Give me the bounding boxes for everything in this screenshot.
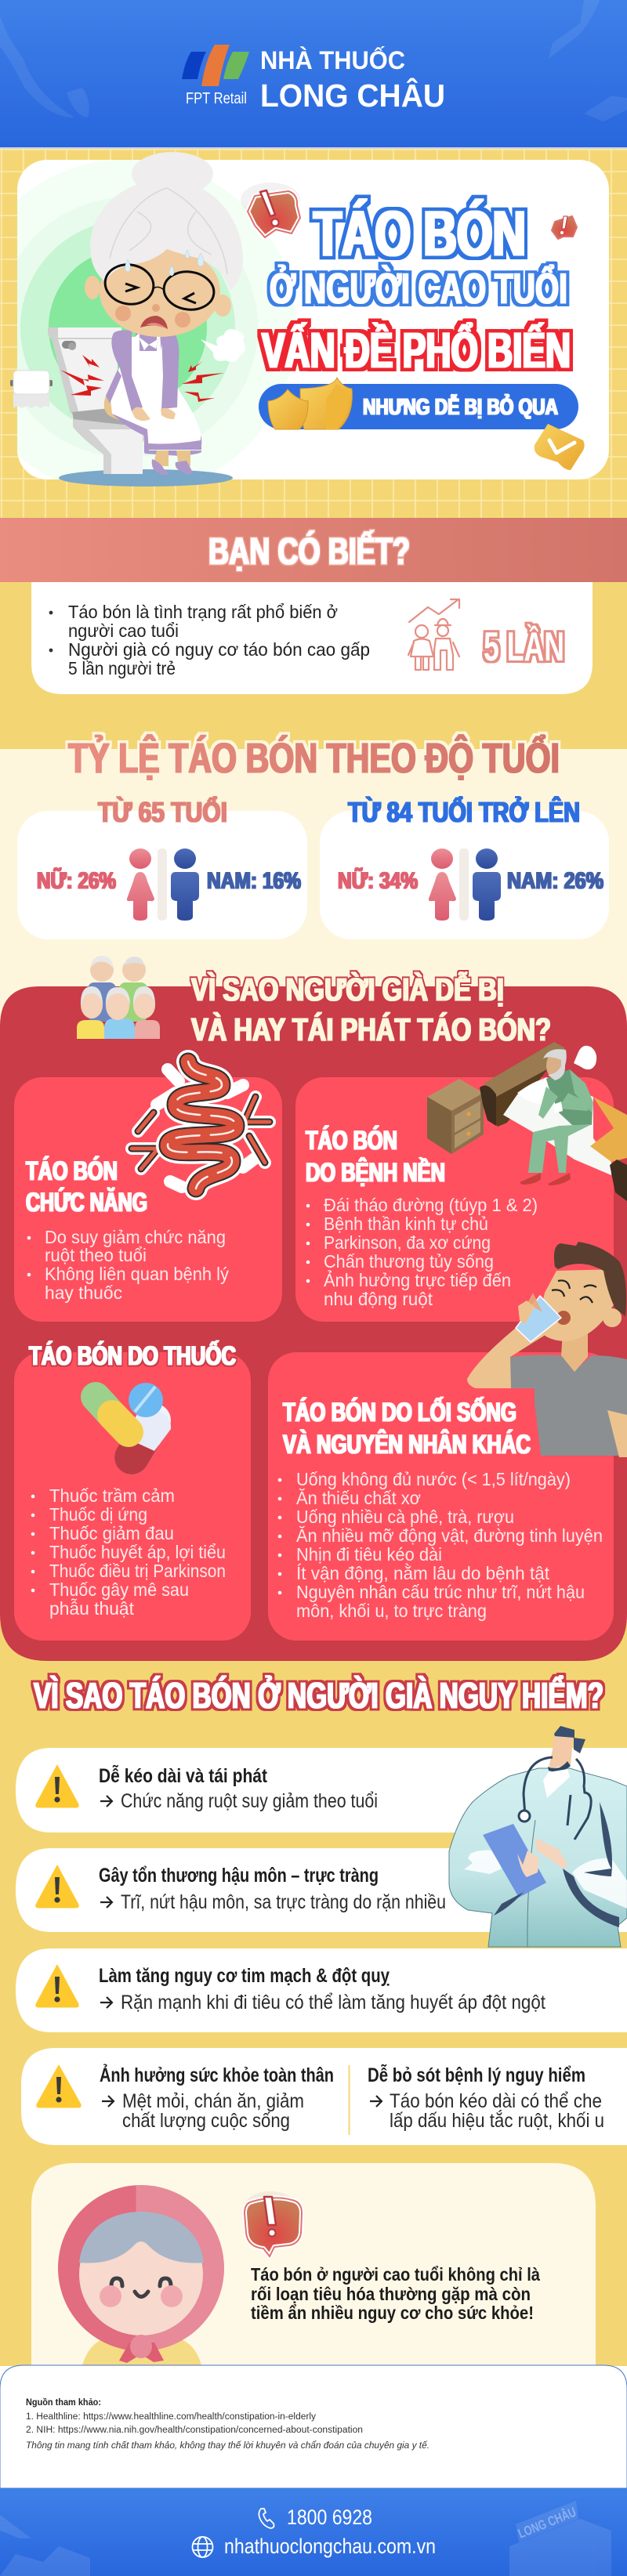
bullet list: Chấn thương tủy sống bbox=[324, 1251, 494, 1272]
bullet list: hay thuốc bbox=[45, 1283, 122, 1303]
head bbox=[541, 1269, 620, 1341]
illustration: grandmother on toilet bbox=[10, 152, 245, 487]
bullet list: Ăn thiếu chất xơ bbox=[296, 1488, 421, 1508]
card bbox=[0, 2365, 627, 2488]
heading line 1: VÌ SAO NGƯỜI GIÀ DỄ BỊ bbox=[191, 971, 504, 1008]
card heading: TÁO BÓN DO THUỐC bbox=[29, 1340, 236, 1371]
banner heading: BẠN CÓ BIẾT? bbox=[208, 530, 410, 573]
fact list: người cao tuổi bbox=[68, 620, 179, 641]
head bbox=[85, 152, 243, 337]
icon: warning bbox=[36, 1965, 78, 2007]
left description bbox=[122, 2090, 304, 2132]
panel: vì sao người già dễ bị bbox=[0, 986, 627, 1661]
fact list: Người già có nguy cơ táo bón cao gấp bbox=[68, 639, 370, 660]
right heading: Dễ bỏ sót bệnh lý nguy hiểm bbox=[368, 2063, 585, 2086]
banner bbox=[0, 518, 627, 582]
man in green bbox=[520, 1049, 593, 1185]
illustration: man drinking water bbox=[467, 1242, 627, 1457]
panel: từ 65 tuổi bbox=[17, 794, 307, 939]
bullet list: Uống không đủ nước (< 1,5 lít/ngày) bbox=[296, 1469, 571, 1489]
speech bubble bbox=[574, 1046, 596, 1069]
left description: chất lượng cuộc sống bbox=[122, 2110, 290, 2132]
icon: alert badge bbox=[245, 2191, 302, 2256]
bullet list: Do suy giảm chức năng bbox=[45, 1227, 226, 1247]
title line 1: TÁO BÓN bbox=[314, 198, 526, 270]
icon: intestine bbox=[132, 1062, 270, 1189]
panel: bạn có biết bbox=[0, 518, 627, 694]
icon: pills bbox=[96, 1383, 171, 1457]
bullet list: Thuốc trầm cảm bbox=[49, 1485, 175, 1506]
bullet list: nhu động ruột bbox=[324, 1289, 433, 1309]
hero background grid bbox=[0, 149, 627, 518]
headboard bbox=[480, 1042, 566, 1127]
bullet list: Ăn nhiều mỡ động vật, đường tinh luyện bbox=[296, 1525, 603, 1546]
left arrow bbox=[102, 2096, 114, 2107]
panel: risk 4 bbox=[21, 2048, 627, 2145]
nightstand bbox=[427, 1079, 484, 1154]
illustration: elderly man on bed bbox=[427, 1042, 627, 1201]
panel: táo bón chức năng bbox=[14, 1062, 282, 1322]
hair bbox=[554, 1242, 626, 1316]
card bbox=[17, 811, 307, 939]
arrow bbox=[100, 1796, 112, 1807]
bullet list: Đái tháo đường (túyp 1 & 2) bbox=[324, 1195, 538, 1215]
panel: risk 1 bbox=[16, 1748, 627, 1833]
right description: Táo bón kéo dài có thể che bbox=[390, 2090, 602, 2112]
card bbox=[31, 2163, 596, 2382]
bullet list: ruột theo tuổi bbox=[45, 1245, 147, 1265]
icon: warning bbox=[36, 1765, 78, 1807]
hero card bbox=[0, 159, 609, 496]
bullet list: Thuốc gây mê sau bbox=[49, 1579, 189, 1600]
bullet list: Nguyên nhân cấu trúc như trĩ, nứt hậu bbox=[296, 1582, 585, 1602]
card bbox=[320, 811, 609, 939]
icon: gold check badge bbox=[535, 424, 585, 470]
heading: Gây tổn thương hậu môn – trực tràng bbox=[99, 1865, 379, 1887]
phone number: 1800 6928 bbox=[287, 2505, 372, 2529]
bullet list: Ảnh hưởng trực tiếp đến bbox=[324, 1268, 511, 1290]
card heading: TÁO BÓN bbox=[26, 1156, 118, 1186]
panel: táo bón do thuốc bbox=[14, 1340, 251, 1641]
notch bbox=[268, 1388, 535, 1459]
card heading: TÁO BÓN DO LỐI SỐNG bbox=[283, 1397, 516, 1427]
decorative store building bbox=[0, 2501, 611, 2576]
card notch and lifestyle text bbox=[268, 1388, 603, 1621]
bullet list: Thuốc huyết áp, lợi tiểu bbox=[49, 1542, 226, 1562]
label: NHƯNG DỄ BỊ BỎ QUA bbox=[363, 393, 558, 420]
bullet list: phẫu thuật bbox=[49, 1598, 135, 1619]
card bbox=[14, 1352, 251, 1641]
label: FPT Retail: FPT Retail bbox=[186, 90, 247, 107]
icon: elderly couple with rising chart bbox=[408, 599, 459, 670]
arrow bbox=[100, 1997, 112, 2008]
heading: vì sao người già dễ bị và hay tái phát táo bón bbox=[191, 971, 551, 1047]
glasses bbox=[102, 261, 216, 313]
left description: Mệt mỏi, chán ăn, giảm bbox=[122, 2090, 304, 2112]
shirt bbox=[510, 1355, 627, 1456]
rug bbox=[59, 469, 233, 487]
card heading: DO BỆNH NỀN bbox=[306, 1158, 445, 1188]
card bbox=[295, 1077, 614, 1322]
fact list bbox=[49, 602, 370, 678]
message: tiềm ẩn nhiều nguy cơ cho sức khỏe! bbox=[251, 2303, 534, 2323]
bullet list: Parkinson, đa xơ cứng bbox=[324, 1232, 491, 1253]
message bbox=[251, 2264, 540, 2323]
heading: Dễ kéo dài và tái phát bbox=[99, 1764, 268, 1787]
card bbox=[14, 1077, 282, 1322]
description: Trĩ, nứt hậu môn, sa trực tràng do rặn nhiều bbox=[121, 1891, 446, 1913]
row bbox=[21, 2048, 627, 2145]
pill: nhưng dễ bị bỏ qua bbox=[259, 384, 578, 429]
icon: globe bbox=[193, 2537, 213, 2557]
arm bbox=[467, 1316, 556, 1391]
icon: female and male figures bbox=[127, 848, 199, 921]
right description: lấp dấu hiệu tắc ruột, khối u bbox=[390, 2109, 604, 2132]
bullet list bbox=[27, 1227, 229, 1303]
icon: group of elderly people bbox=[77, 956, 160, 1039]
bullet list bbox=[31, 1485, 226, 1619]
stethoscope bbox=[524, 1757, 591, 1840]
cheeks, nose and mouth bbox=[115, 304, 190, 329]
coat bbox=[449, 1768, 627, 1947]
panel: risk 3 bbox=[16, 1948, 627, 2032]
right description bbox=[390, 2090, 604, 2132]
right arrow bbox=[370, 2096, 382, 2107]
section background: yellow bbox=[0, 582, 627, 749]
footer band bbox=[0, 2488, 627, 2576]
fact card bbox=[31, 582, 593, 694]
row bbox=[16, 1848, 627, 1932]
heading: Làm tăng nguy cơ tim mạch & đột quỵ bbox=[99, 1965, 390, 1987]
label: Nhà thuốc: NHÀ THUỐC bbox=[260, 46, 405, 74]
hair bun bbox=[132, 152, 213, 196]
icon: red alert badge small bbox=[552, 216, 577, 239]
description: Rặn mạnh khi đi tiêu có thể làm tăng huyết áp đột ngột bbox=[121, 1992, 545, 2013]
arrow bbox=[100, 1897, 112, 1908]
panel: closing message bbox=[31, 2163, 596, 2382]
left heading: Ảnh hưởng sức khỏe toàn thân bbox=[100, 2063, 334, 2086]
icon: warning bbox=[36, 1865, 78, 1908]
illustration: doctor bbox=[449, 1726, 627, 1947]
section background: cream bbox=[0, 749, 627, 1062]
logo: FPT Retail and Nhà thuốc Long Châu bbox=[182, 45, 445, 114]
disclaimer: Thông tin mang tính chất tham khảo, không thay thế lời khuyên và chẩn đoán của chuyên gia y tế. bbox=[26, 2441, 429, 2451]
panel: references bbox=[0, 2365, 627, 2488]
head bbox=[548, 1726, 585, 1772]
heading: TỪ 65 TUỔI bbox=[98, 794, 227, 828]
hair bbox=[90, 179, 243, 291]
bullet list: Thuốc dị ứng bbox=[49, 1504, 147, 1525]
icon: gold shields bbox=[268, 378, 352, 429]
section background: lower yellow bbox=[0, 1614, 627, 2366]
card heading: CHỨC NĂNG bbox=[26, 1188, 147, 1217]
sweat drops bbox=[125, 250, 204, 276]
panel: táo bón do lối sống bbox=[268, 1352, 614, 1641]
bed and blanket bbox=[503, 1077, 627, 1201]
pain bolts bbox=[60, 355, 224, 402]
coat seam bbox=[527, 1820, 535, 1947]
collar bbox=[543, 1769, 570, 1798]
fact list: Táo bón là tình trạng rất phổ biến ở bbox=[68, 602, 338, 622]
hero title bbox=[262, 198, 571, 378]
puff cloud bbox=[201, 329, 245, 362]
store label: LONG CHÂU bbox=[516, 2505, 578, 2542]
card heading: VÀ NGUYÊN NHÂN KHÁC bbox=[283, 1430, 531, 1460]
message: Táo bón ở người cao tuổi không chỉ là bbox=[251, 2264, 540, 2285]
label: nam: NAM: 26% bbox=[507, 868, 603, 894]
references heading: Nguồn tham khảo: bbox=[26, 2398, 101, 2408]
bullet list: Thuốc giảm đau bbox=[49, 1523, 174, 1543]
description: Chức năng ruột suy giảm theo tuổi bbox=[121, 1790, 378, 1812]
icon: red alert badge large bbox=[241, 183, 300, 237]
glass of water bbox=[516, 1296, 561, 1342]
bullet list: Không liên quan bệnh lý bbox=[45, 1264, 229, 1284]
toilet paper roll bbox=[10, 371, 53, 408]
card heading bbox=[26, 1156, 147, 1217]
website: nhathuoclongchau.com.vn bbox=[224, 2534, 436, 2558]
bullet list: môn, khối u, to trực tràng bbox=[296, 1601, 487, 1621]
label: nữ: NỮ: 34% bbox=[338, 867, 418, 894]
label: nữ: NỮ: 26% bbox=[37, 867, 116, 894]
label: nam: NAM: 16% bbox=[207, 868, 301, 894]
bullet list: Nhịn đi tiêu kéo dài bbox=[296, 1544, 442, 1565]
icon: warning bbox=[37, 2065, 81, 2107]
card heading bbox=[283, 1397, 531, 1460]
reference 2: 2. NIH: https://www.nia.nih.gov/health/constipation/concerned-about-constipation bbox=[26, 2426, 363, 2435]
coat highlights bbox=[464, 1851, 627, 1908]
icon: FPT logo bbox=[182, 45, 249, 86]
icon: female and male figures bbox=[429, 848, 501, 921]
panel: từ 84 tuổi trở lên bbox=[320, 794, 609, 939]
bullet list bbox=[278, 1469, 603, 1621]
label: Long Châu: LONG CHÂU bbox=[260, 78, 445, 114]
label: 5 lần: 5 LẦN bbox=[484, 624, 564, 670]
card heading bbox=[306, 1126, 445, 1188]
clipboard bbox=[483, 1824, 546, 1898]
bullet list: Ít vận động, nằm lâu do bệnh tật bbox=[296, 1563, 550, 1583]
icon: phone bbox=[259, 2509, 274, 2528]
row bbox=[16, 1748, 627, 1833]
body and dress bbox=[104, 329, 201, 475]
row bbox=[16, 1948, 627, 2032]
toilet bbox=[48, 327, 145, 474]
card heading: TÁO BÓN bbox=[306, 1126, 397, 1156]
hand bbox=[517, 1838, 568, 1877]
eyes bbox=[552, 1280, 596, 1303]
panel: táo bón do bệnh nền bbox=[295, 1077, 614, 1322]
bullet list bbox=[306, 1195, 538, 1309]
coat shadow bbox=[494, 1802, 619, 1927]
panel: risk 2 bbox=[16, 1848, 627, 1932]
fact list: 5 lần người trẻ bbox=[68, 658, 176, 678]
bullet list: Thuốc điều trị Parkinson bbox=[49, 1561, 226, 1581]
bullet list: Bệnh thần kinh tự chủ bbox=[324, 1214, 488, 1234]
icon: grandmother face bbox=[58, 2185, 224, 2365]
reference 1: 1. Healthline: https://www.healthline.com/health/constipation-in-elderly bbox=[26, 2412, 316, 2422]
header band bbox=[0, 0, 627, 149]
bullet list: Uống nhiều cà phê, trà, rượu bbox=[296, 1507, 514, 1527]
message: rối loạn tiêu hóa thường gặp mà còn bbox=[251, 2284, 531, 2304]
